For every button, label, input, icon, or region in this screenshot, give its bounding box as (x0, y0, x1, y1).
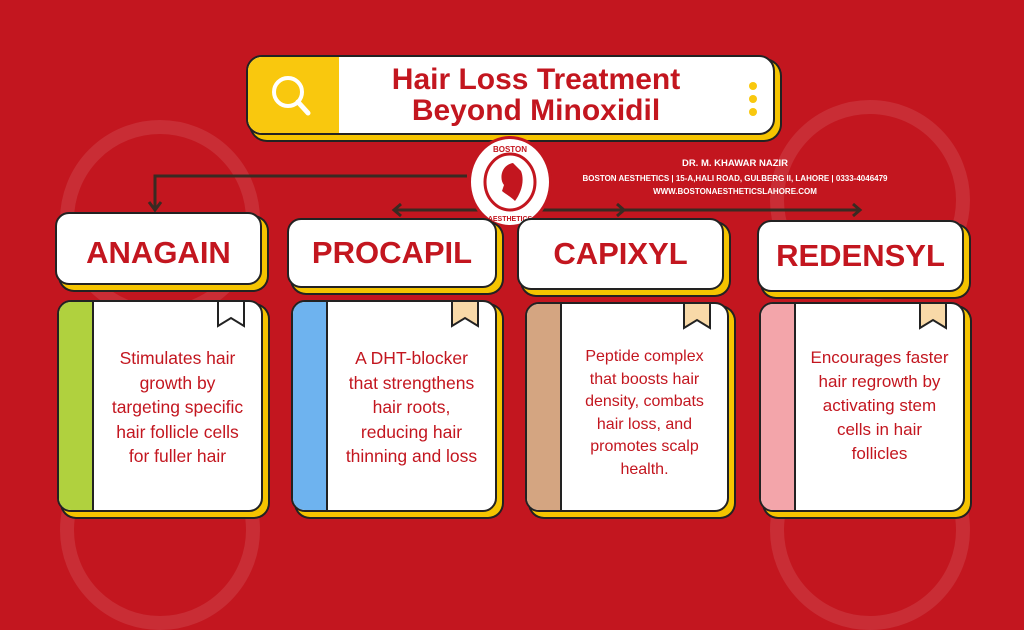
logo: BOSTON (493, 145, 527, 154)
card: capixyl: hair loss, and (597, 416, 692, 432)
name: ANAGAIN: ANAGAIN (86, 234, 231, 270)
card: redensyl: hair regrowth by (819, 372, 940, 391)
contact info: BOSTON AESTHETICS | 15-A,HALI ROAD, GULBERG II, LAHORE | 0333-4046479 (582, 174, 888, 183)
card: anagain: growth by (140, 372, 215, 392)
contact info: WWW.BOSTONAESTHETICSLAHORE.COM (653, 187, 817, 196)
card: capixyl: health. (620, 460, 669, 478)
title bar (246, 55, 775, 135)
name: PROCAPIL: PROCAPIL (312, 235, 472, 270)
logo: AESTHETICS (488, 216, 532, 223)
card: procapil: thinning and loss (346, 446, 477, 466)
card: redensyl (759, 302, 965, 512)
card: procapil: reducing hair (361, 422, 462, 442)
card: capixyl (525, 302, 729, 512)
name: REDENSYL (757, 220, 964, 292)
card: procapil (291, 300, 497, 512)
card: procapil: A DHT-blocker (355, 348, 468, 368)
logo (468, 136, 552, 228)
card: redensyl: Encourages faster (811, 348, 948, 367)
card: anagain: for fuller hair (129, 446, 226, 466)
title text: Beyond Minoxidil (412, 94, 660, 127)
card: redensyl: cells in hair (837, 420, 922, 439)
card: anagain (57, 300, 263, 512)
card: procapil: hair roots, (373, 397, 450, 417)
card: redensyl: activating stem (823, 396, 936, 415)
name: CAPIXYL (517, 218, 724, 290)
name: ANAGAIN (55, 212, 262, 285)
card: procapil: that strengthens (349, 372, 474, 392)
card: anagain: Stimulates hair (120, 348, 235, 368)
card: anagain: hair follicle cells (116, 422, 239, 442)
card: capixyl: that boosts hair (590, 370, 699, 388)
icon: search (248, 57, 339, 133)
icon: dots (749, 82, 757, 116)
card: capixyl: Peptide complex (585, 348, 704, 365)
contact info: DR. M. KHAWAR NAZIR (682, 158, 788, 169)
name: PROCAPIL (287, 218, 497, 288)
card: anagain: targeting specific (112, 397, 243, 417)
name: REDENSYL: REDENSYL (776, 238, 945, 273)
name: CAPIXYL: CAPIXYL (553, 236, 688, 271)
card: capixyl: density, combats (585, 393, 704, 410)
title text (392, 63, 680, 127)
contact info (582, 158, 888, 196)
card: redensyl: follicles (852, 444, 907, 463)
card: capixyl: promotes scalp (590, 438, 699, 455)
title text: Hair Loss Treatment (392, 63, 680, 96)
